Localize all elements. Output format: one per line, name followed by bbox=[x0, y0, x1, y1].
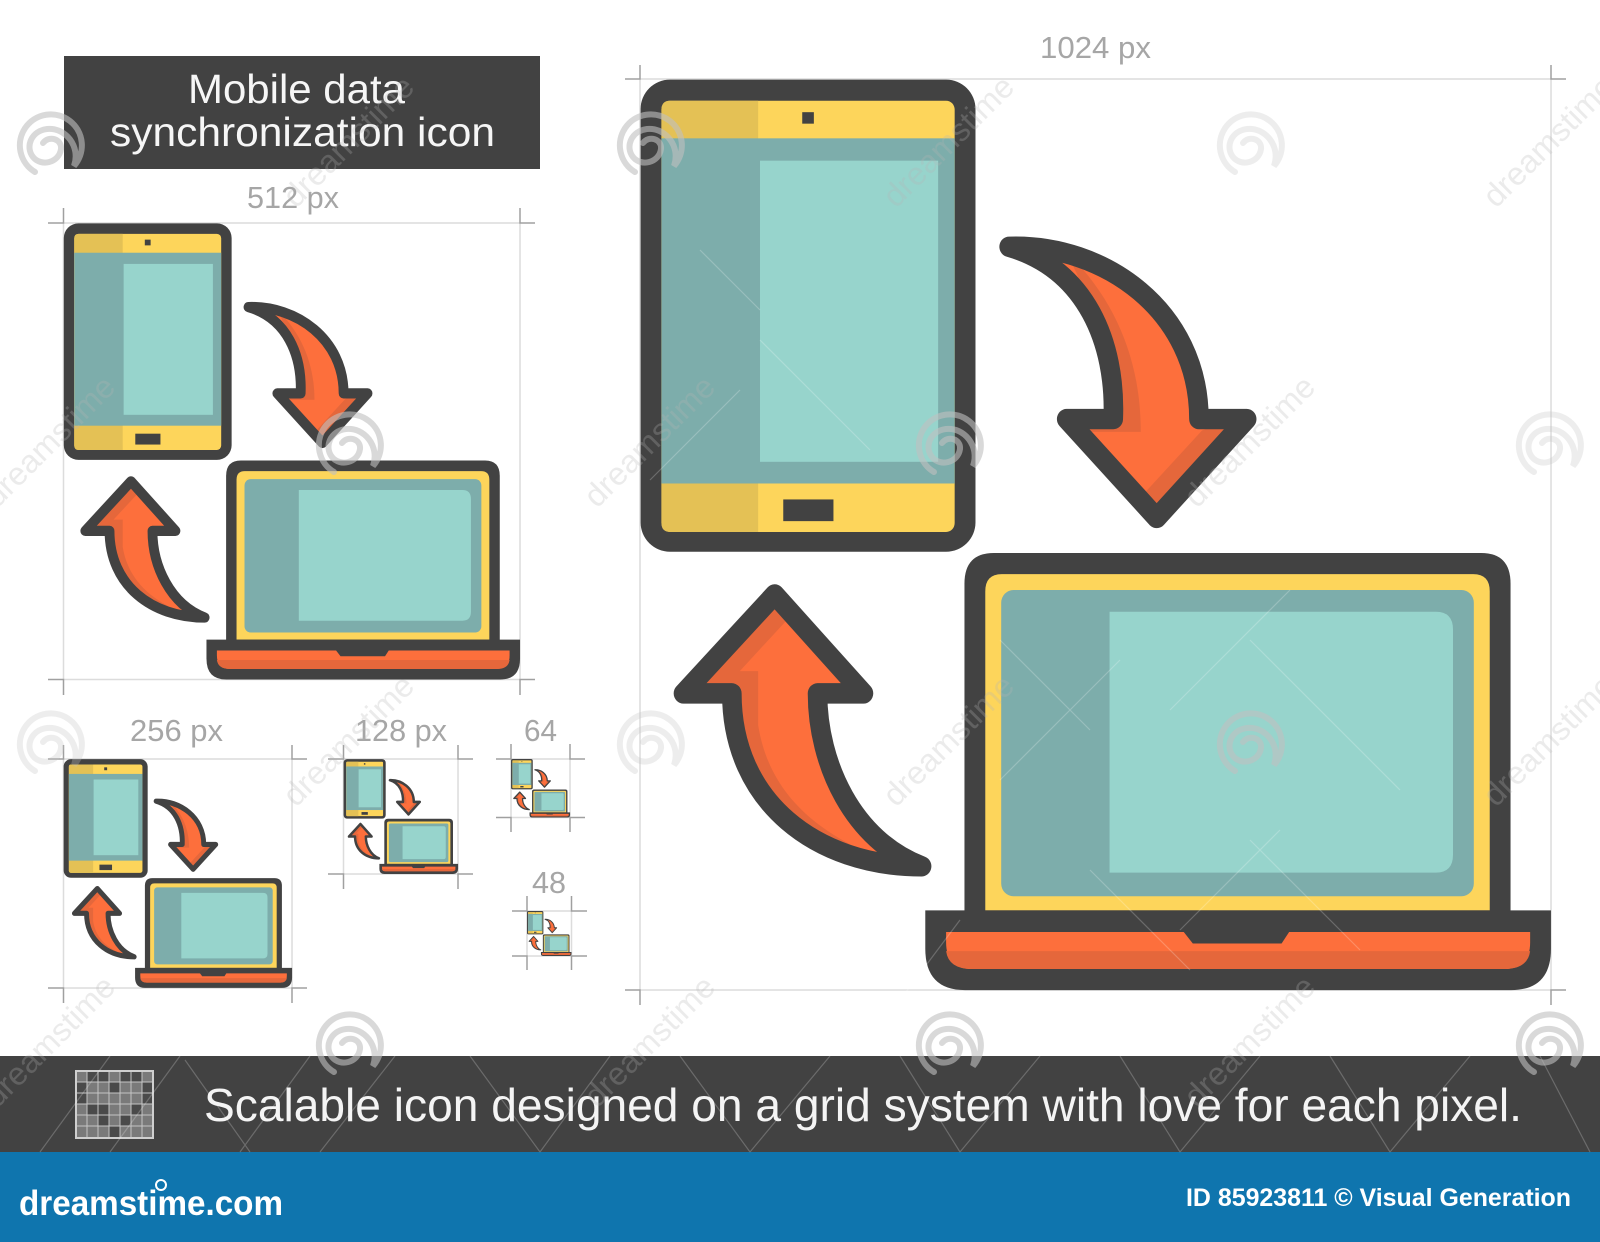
icon: pixel grid bbox=[76, 1071, 153, 1138]
watermark pattern: dreamstime bbox=[576, 368, 722, 514]
icon 128 px bbox=[344, 759, 458, 874]
size label: 48: 48 bbox=[532, 865, 566, 900]
watermark pattern: dreamstime bbox=[576, 968, 722, 1114]
watermark pattern: dreamstime bbox=[275, 68, 421, 214]
size label: 1024 px: 1024 px bbox=[1040, 30, 1151, 65]
size label: 64: 64 bbox=[524, 713, 557, 748]
icon 1024 px bbox=[641, 80, 1551, 990]
grid system band bbox=[0, 1056, 1600, 1152]
dreamstime logo: dreamstime.com bbox=[19, 1184, 283, 1223]
title: Mobile data bbox=[188, 66, 405, 112]
footer bar bbox=[0, 1152, 1600, 1242]
size label: 128 px: 128 px bbox=[355, 713, 447, 748]
image id and credit: ID 85923811 © Visual Generation bbox=[1186, 1184, 1571, 1212]
title: synchronization icon bbox=[110, 109, 495, 155]
header banner bbox=[64, 56, 540, 169]
icon 64 px bbox=[511, 759, 570, 818]
watermark pattern: dreamstime bbox=[875, 68, 1021, 214]
arrow up bbox=[683, 595, 922, 866]
pixel grid frames bbox=[48, 65, 1566, 1005]
watermark pattern: dreamstime bbox=[1176, 968, 1322, 1114]
arrow down bbox=[1009, 247, 1247, 518]
icon 512 px bbox=[64, 223, 520, 680]
tagline: Scalable icon designed on a grid system with love for each pixel. bbox=[204, 1079, 1522, 1131]
tablet bbox=[641, 80, 975, 552]
watermark pattern: dreamstime bbox=[275, 667, 421, 813]
watermark pattern: dreamstime bbox=[1176, 368, 1322, 514]
title bbox=[110, 66, 495, 155]
icon 48 px bbox=[527, 911, 571, 956]
size label: 256 px: 256 px bbox=[130, 713, 223, 748]
watermark pattern: dreamstime bbox=[875, 667, 1021, 813]
size label: 512 px: 512 px bbox=[247, 180, 339, 215]
laptop bbox=[925, 553, 1551, 990]
icon 256 px bbox=[64, 759, 292, 988]
